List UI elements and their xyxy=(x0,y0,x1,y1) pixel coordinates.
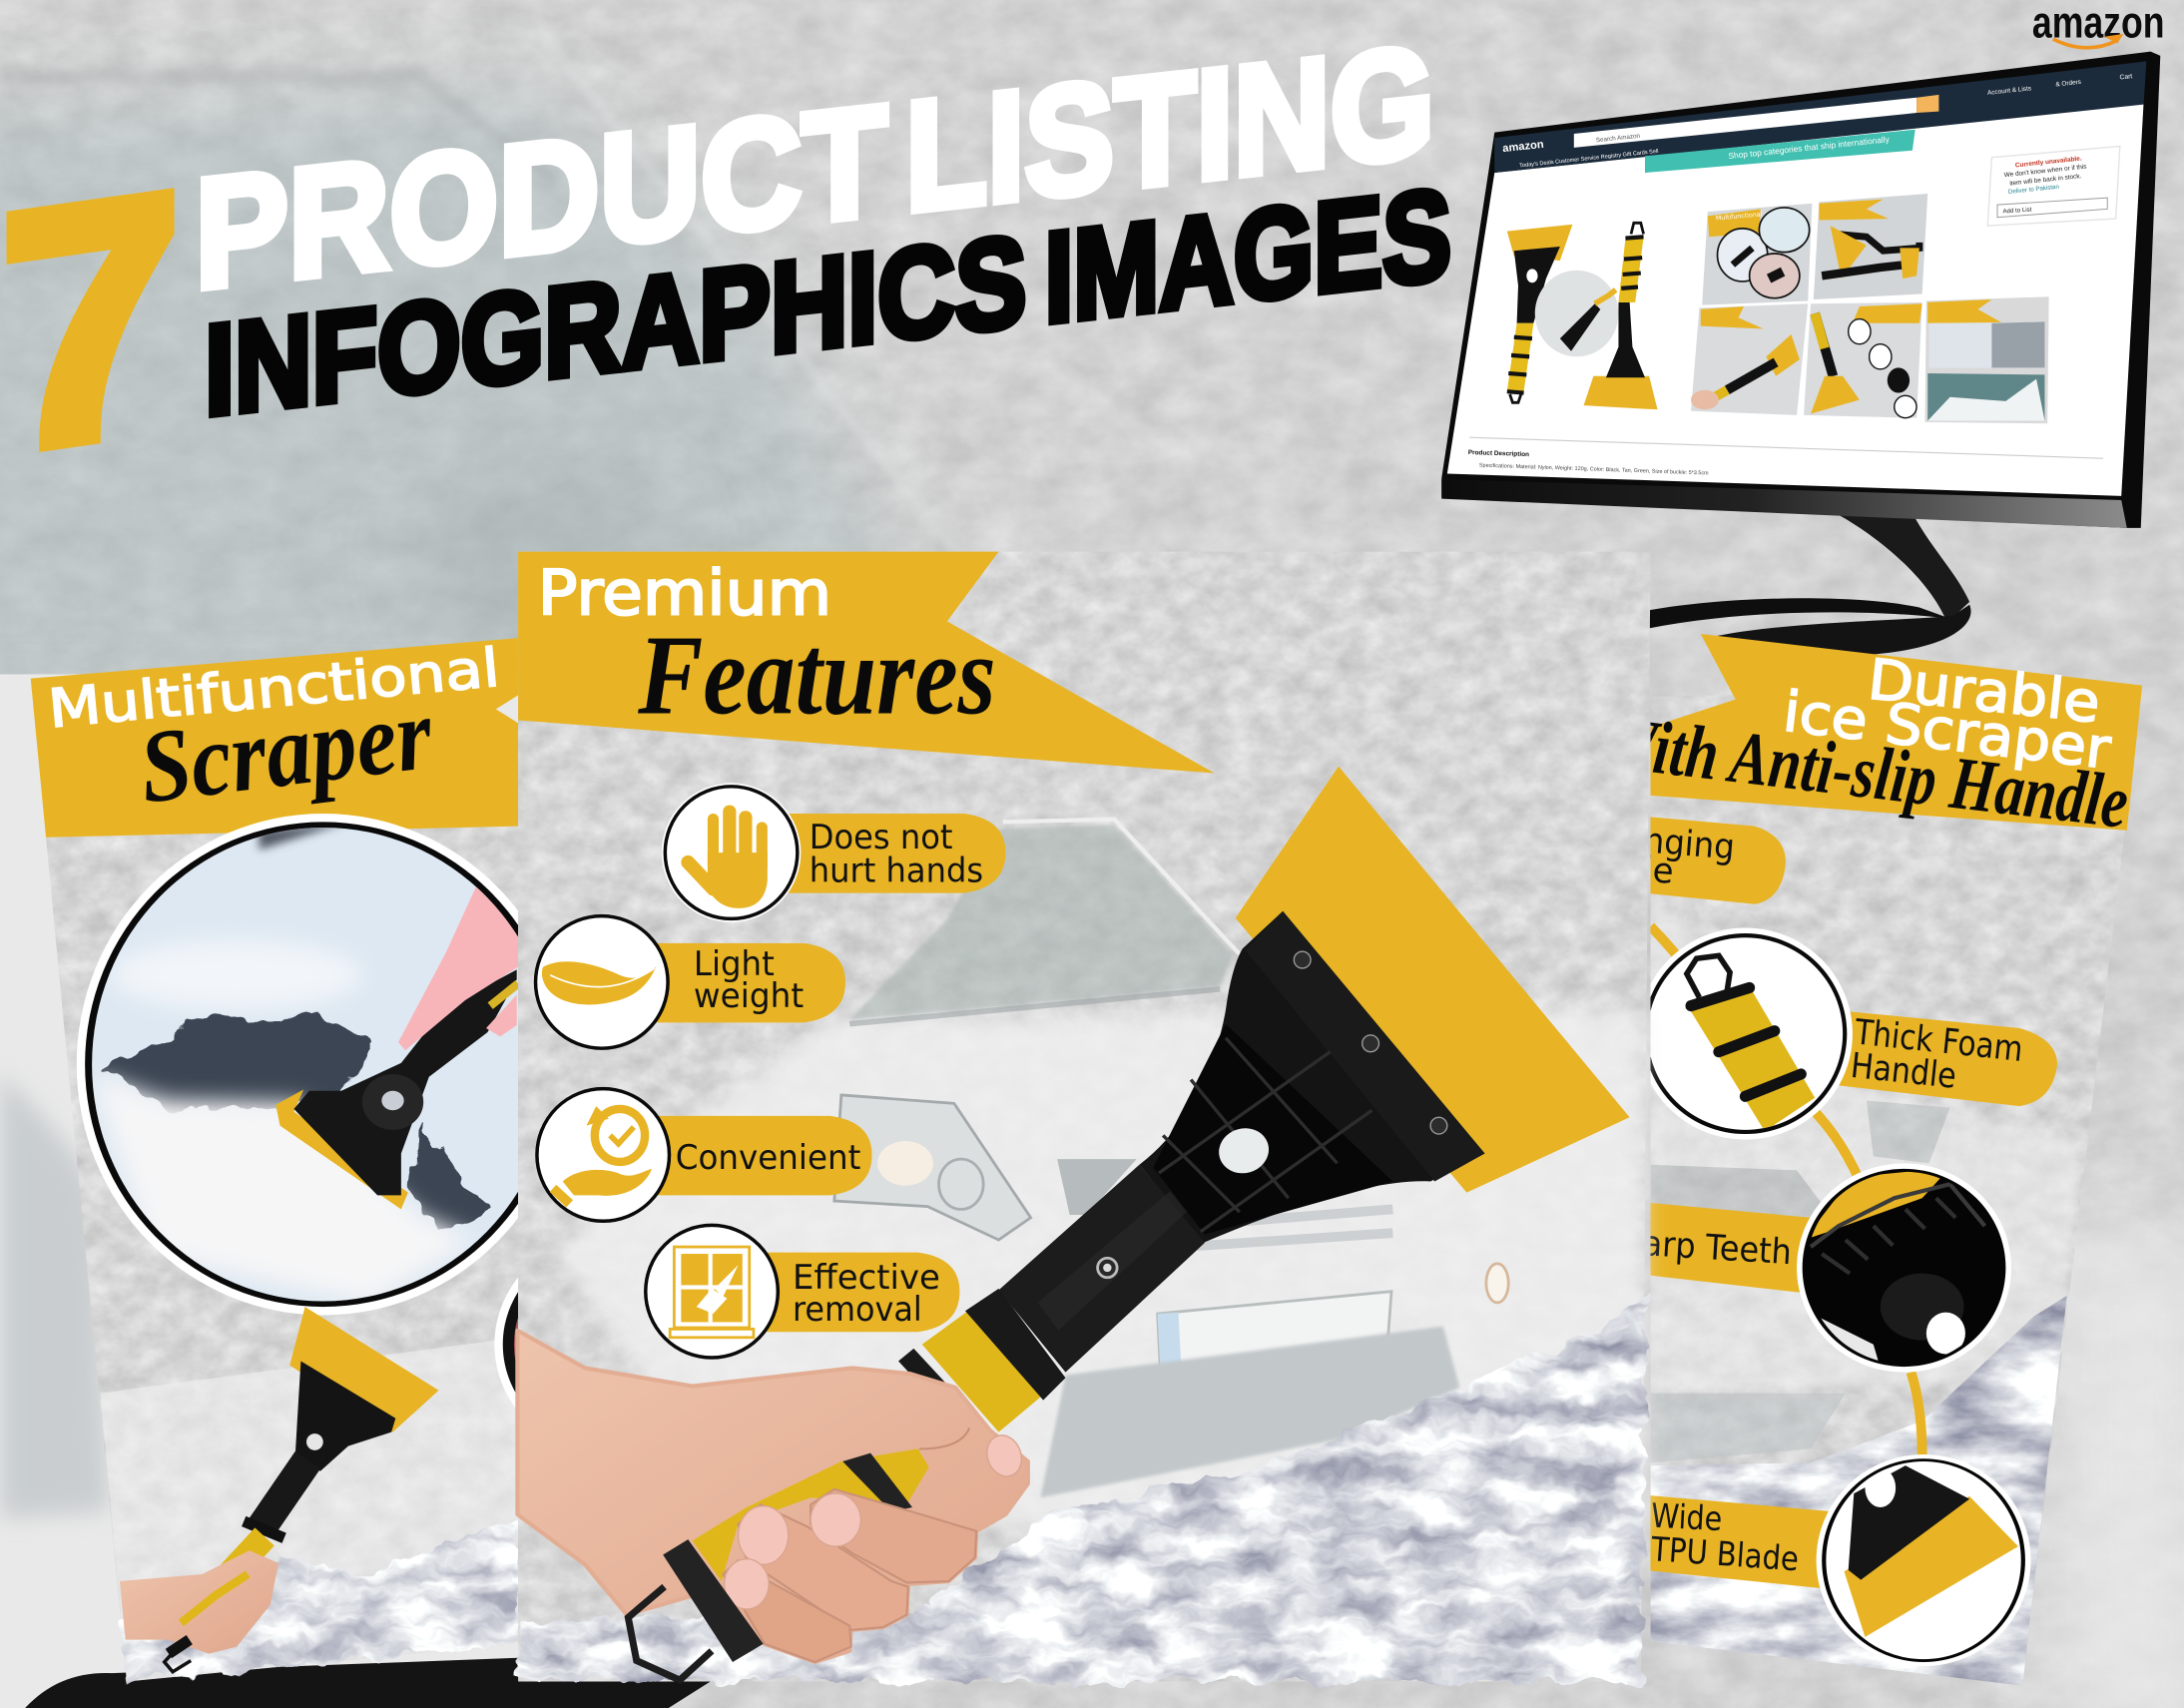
feature: does not hurt hands xyxy=(663,785,1005,920)
product description: Product Description xyxy=(1468,449,1529,458)
callout: sharp teeth: Sharp Teeth xyxy=(1601,1222,1793,1273)
product: scraper held in a hand xyxy=(517,767,1630,1680)
thumbnail: durable ice scraper xyxy=(1804,302,1922,418)
snow xyxy=(123,1518,518,1681)
banner xyxy=(31,637,518,838)
title line: infographics images: IMAGES xyxy=(1045,162,1451,350)
amazon navigation bar: Search Amazon xyxy=(1596,133,1641,144)
photo circle: scraping a snowy windscreen xyxy=(76,814,519,1316)
callout: sharp teeth xyxy=(1601,1202,1811,1293)
hanging hole xyxy=(1214,1123,1274,1179)
callout: wide tpu blade: TPU Blade xyxy=(1649,1529,1800,1578)
feature: does not hurt hands: hurt hands xyxy=(810,851,983,889)
scraper blade xyxy=(1236,767,1630,1193)
snow xyxy=(1651,1296,2067,1686)
feature: effective removal: removal xyxy=(793,1290,922,1329)
title line: infographics images: INFOGRAPHICS xyxy=(205,209,1026,443)
title line: product listing xyxy=(195,13,1434,322)
banner title: durable: Durable xyxy=(1865,647,2103,736)
pill xyxy=(759,814,1005,893)
callout: wide tpu blade: Wide xyxy=(1650,1496,1723,1538)
availability box: item will be back in stock. xyxy=(2009,173,2082,188)
main product images xyxy=(1507,223,1658,409)
callout: hanging hole xyxy=(1598,817,1786,904)
availability box xyxy=(1987,147,2120,226)
thumbnail: premium features xyxy=(1691,303,1808,415)
hanging loop xyxy=(628,1587,712,1680)
circle: wide blade detail xyxy=(1817,1454,2031,1666)
poster background xyxy=(46,822,518,1681)
title line: product listing: LISTING xyxy=(905,13,1434,245)
faint car xyxy=(1651,891,2082,1462)
thumbnail: effective snow ice removal xyxy=(1924,296,2049,423)
grip end cap xyxy=(663,1539,764,1662)
title xyxy=(0,13,1451,521)
promo strip xyxy=(1645,130,1915,173)
icon: clock in hand xyxy=(537,1089,669,1221)
promo strip: Shop top categories that ship internationally xyxy=(1728,134,1891,161)
feature: effective removal: Effective xyxy=(793,1258,940,1297)
title line: product listing: PRODUCT xyxy=(195,73,887,322)
poster background xyxy=(518,552,1651,1681)
amazon navigation bar: & Orders xyxy=(2055,79,2081,89)
connector lines xyxy=(1651,926,1922,1455)
blade rivets xyxy=(1294,951,1447,1134)
monitor frame xyxy=(1441,52,2160,528)
availability box: We don't know when or if this xyxy=(2003,164,2087,179)
feature: light weight xyxy=(536,916,845,1048)
scraper head xyxy=(1139,911,1485,1243)
black car silhouette at the lower left xyxy=(25,1658,711,1708)
availability box: Currently unavailable. xyxy=(2015,155,2082,169)
feature: convenient xyxy=(537,1089,872,1221)
poster: multifunctional scraper xyxy=(30,638,519,1685)
banner title: premium: Premium xyxy=(538,556,831,629)
icon: hand xyxy=(663,785,800,920)
amazon navigation bar xyxy=(1494,61,2146,173)
banner xyxy=(1651,634,2142,831)
callout: thick foam handle xyxy=(1825,1011,2057,1106)
icon: window and brush xyxy=(646,1225,778,1358)
frosted car behind the product xyxy=(557,820,1644,1532)
poster background xyxy=(1651,686,2142,1686)
infographic thumbnails xyxy=(1691,194,2049,423)
bottom bezel xyxy=(1441,479,2127,528)
banner title: ice scraper: ice Scraper xyxy=(1780,680,2114,783)
snow bank xyxy=(518,1289,1648,1681)
thumbnail: multifunctional scraper: Multifunctional xyxy=(1716,211,1763,222)
icon: feather xyxy=(536,916,668,1048)
amazon navigation bar: Today's Deals Customer Service Registry Gift Cards Sell xyxy=(1519,149,1659,169)
monitor xyxy=(1441,52,2160,528)
banner script: features: Features xyxy=(637,612,996,739)
product description: Specifications: Material: Nylon, Weight: 120g, Color: Black, Tan, Green, Size of buckle: 5*3.5cm xyxy=(1479,463,1709,477)
amazon navigation bar: amazon xyxy=(1502,139,1544,155)
feature: does not hurt hands: Does not xyxy=(810,818,952,856)
callout: hanging hole: Hanging xyxy=(1598,818,1736,868)
partly hidden photo circle xyxy=(495,1278,519,1408)
screen xyxy=(1447,103,2144,496)
circle: foam handle detail xyxy=(1638,927,1853,1140)
availability box: Deliver to Pakistan xyxy=(2008,184,2060,196)
product photo: small scraper in hand xyxy=(120,1307,439,1672)
banner xyxy=(518,552,1215,774)
numeral 7: 7 xyxy=(0,123,181,521)
callout: thick foam handle: Thick Foam xyxy=(1853,1012,2024,1070)
callout: thick foam handle: Handle xyxy=(1849,1046,1958,1097)
amazon navigation bar: Cart xyxy=(2119,73,2133,82)
circle: sharp teeth detail xyxy=(1797,1163,2011,1373)
callout: wide tpu blade xyxy=(1644,1494,1833,1588)
monitor stand xyxy=(1649,514,1971,655)
poster: premium features xyxy=(517,552,1651,1681)
foam grip xyxy=(922,1311,1042,1432)
banner script: scraper: Scraper xyxy=(134,677,438,826)
feature: light weight: Light xyxy=(694,944,775,983)
poster: durable ice scraper xyxy=(1598,634,2142,1686)
handle neck xyxy=(999,1165,1205,1373)
thumbnail: product size and details xyxy=(1814,194,1927,299)
feature: effective removal xyxy=(646,1225,959,1358)
feature: light weight: weight xyxy=(694,976,804,1015)
callout: hanging hole: hole xyxy=(1600,847,1675,892)
hand xyxy=(517,1331,1028,1662)
feature: convenient: Convenient xyxy=(676,1138,860,1177)
banner title: multifunctional: Multifunctional xyxy=(46,637,502,740)
amazon navigation bar: Account & Lists xyxy=(1987,85,2031,97)
availability box: Add to List xyxy=(2002,206,2032,216)
product description xyxy=(1468,437,2103,477)
thumbnail: multifunctional scraper xyxy=(1702,204,1812,305)
